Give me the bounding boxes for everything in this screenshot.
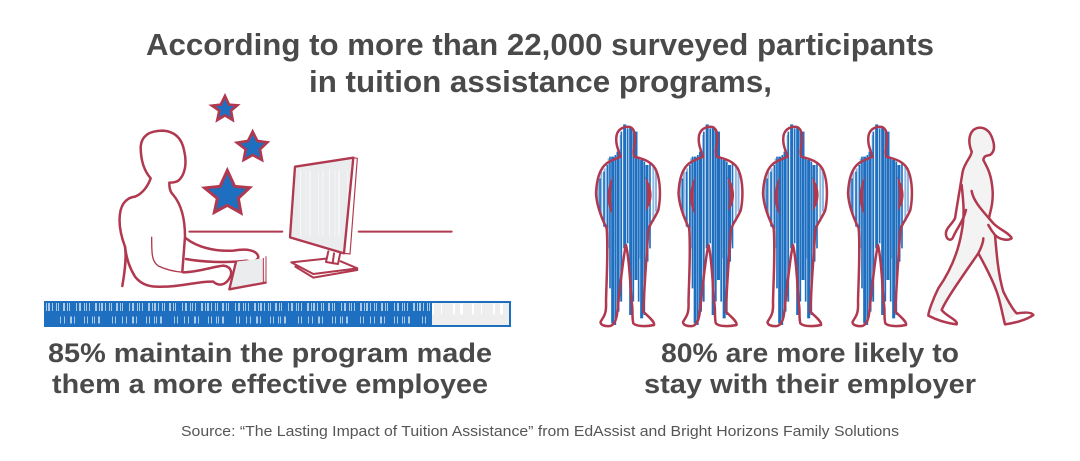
progress bar: 85% xyxy=(44,301,511,327)
caption: 85% xyxy=(48,338,492,399)
title: in tuition assistance programs, xyxy=(309,64,772,99)
figure 4: staying xyxy=(848,124,912,326)
laptop xyxy=(229,257,266,289)
icon: three stars xyxy=(205,96,267,213)
caption: 80%: stay with their employer xyxy=(644,369,977,399)
monitor xyxy=(290,158,357,278)
figure 5: walking away xyxy=(928,128,1033,324)
caption: 85%: them a more effective employee xyxy=(52,369,488,399)
caption: 80%: 80% are more likely to xyxy=(661,338,959,368)
illustration: person working at computer xyxy=(120,96,452,289)
desk line xyxy=(189,229,452,235)
title xyxy=(146,27,934,99)
person outline xyxy=(120,131,258,287)
source note: Source: “The Lasting Impact of Tuition Assistance” from EdAssist and Bright Horizons Family Solutions xyxy=(181,423,899,440)
caption: 85%: 85% maintain the program made xyxy=(48,338,492,368)
figure 3: staying xyxy=(763,124,827,326)
figure 2: staying xyxy=(678,124,742,326)
title: According to more than 22,000 surveyed participants xyxy=(146,27,934,62)
caption: 80% xyxy=(644,338,977,399)
figure 1: staying xyxy=(596,124,660,326)
